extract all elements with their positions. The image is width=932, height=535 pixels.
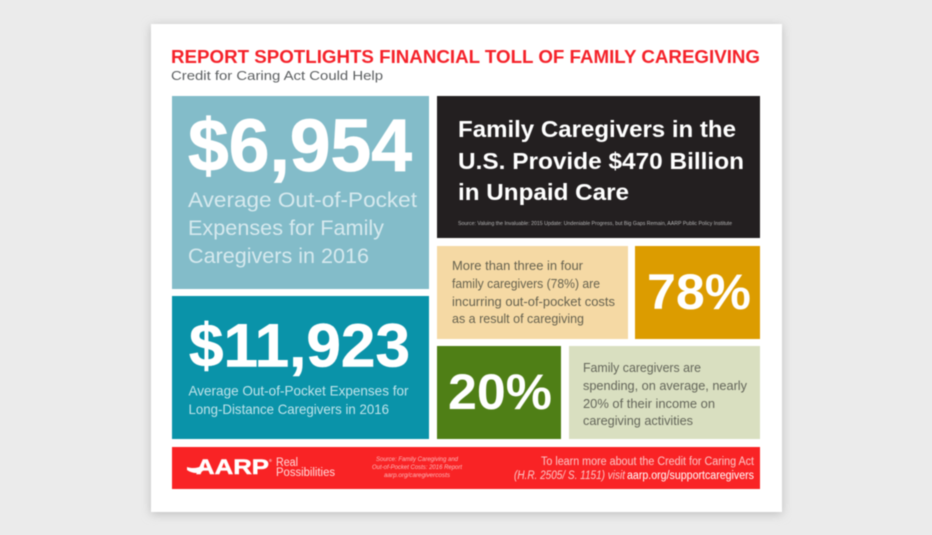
logo: AARP Real Possibilities: Possibilities xyxy=(276,467,335,479)
source note xyxy=(372,456,463,479)
description: Expenses for Family xyxy=(188,217,385,240)
stat value: 78% xyxy=(647,264,751,320)
panel: 78% description xyxy=(437,246,628,339)
stat value: 20% xyxy=(448,364,552,420)
logo: AARP Real Possibilities: AARP xyxy=(196,456,269,479)
big number: $6,954: $6,954 xyxy=(188,104,412,187)
description xyxy=(452,258,615,326)
card xyxy=(151,24,782,512)
description: 20% of their income on xyxy=(583,396,715,411)
logo: AARP Real Possibilities: Real xyxy=(276,457,298,469)
panel: $11,923 long-distance caregiver expenses xyxy=(172,296,429,439)
description: Average Out-of-Pocket Expenses for xyxy=(188,382,409,398)
description xyxy=(583,360,747,428)
description: spending, on average, nearly xyxy=(583,378,747,393)
panel: 78% stat xyxy=(635,246,760,339)
panel: 20% stat xyxy=(437,346,561,439)
description: family caregivers (78%) are xyxy=(452,276,600,291)
big number: $11,923: $11,923 xyxy=(189,312,410,380)
call to action: aarp.org/supportcaregivers xyxy=(627,470,754,482)
description: Family caregivers are xyxy=(583,360,701,375)
title: REPORT SPOTLIGHTS FINANCIAL TOLL OF FAMILY CAREGIVING xyxy=(171,46,760,67)
call to action: (H.R. 2505/ S. 1151) visit xyxy=(514,470,626,482)
logo: AARP Real Possibilities: ® xyxy=(269,458,272,463)
description: incurring out-of-pocket costs xyxy=(452,294,615,309)
description xyxy=(188,189,417,268)
description: Long-Distance Caregivers in 2016 xyxy=(188,401,389,417)
source note: Source: Valuing the Invaluable: 2015 Update: Undeniable Progress, but Big Gaps Remain, AARP Public Policy Institute xyxy=(458,221,732,227)
panel: 20% description xyxy=(569,346,760,439)
source note: aarp.org/caregivercosts xyxy=(384,472,451,479)
description: Average Out-of-Pocket xyxy=(188,189,417,212)
logo: AARP Real Possibilities xyxy=(187,456,335,479)
heading: Family Caregivers in the xyxy=(458,116,736,142)
description: caregiving activities xyxy=(583,413,693,428)
description: More than three in four xyxy=(452,258,584,273)
panel: $470 billion unpaid care xyxy=(437,96,760,238)
description xyxy=(188,382,409,417)
heading: U.S. Provide $470 Billion xyxy=(458,148,744,174)
description: Caregivers in 2016 xyxy=(188,245,369,268)
heading: in Unpaid Care xyxy=(458,179,629,205)
source note: Out-of-Pocket Costs: 2016 Report xyxy=(372,464,463,471)
source note: Source: Family Caregiving and xyxy=(376,456,458,463)
call to action: To learn more about the Credit for Caring Act xyxy=(541,456,755,468)
footer band xyxy=(172,447,760,489)
description: as a result of caregiving xyxy=(452,311,584,326)
panel: $6,954 family caregiver expenses xyxy=(172,96,429,289)
heading xyxy=(458,116,744,205)
subtitle: Credit for Caring Act Could Help xyxy=(171,68,383,83)
call to action xyxy=(514,456,755,482)
